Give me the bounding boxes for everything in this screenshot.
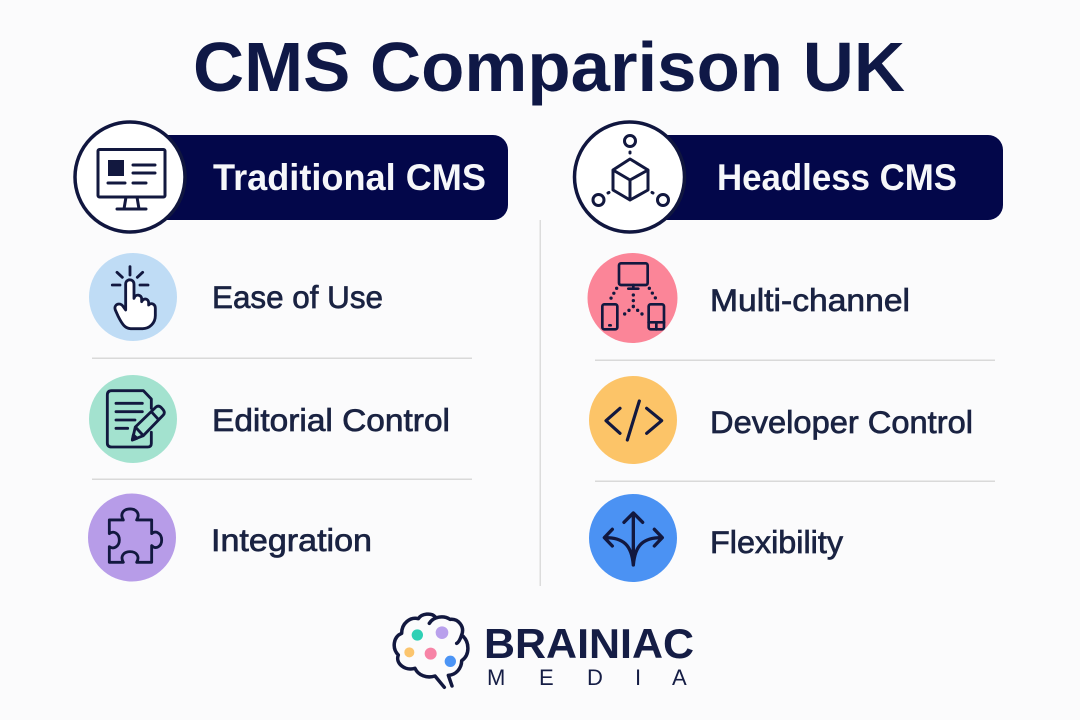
feature: Editorial Control <box>89 375 450 463</box>
heading: Headless CMS: Headless CMS <box>717 157 957 198</box>
feature: Multi-channel <box>588 253 910 343</box>
icon: branching arrows <box>604 513 662 565</box>
icon: brain with coloured dots <box>394 614 468 687</box>
panel: Headless CMS features <box>588 253 973 582</box>
panel: Headless CMS header <box>574 122 1003 232</box>
wordmark: BRAINIAC: BRAINIAC <box>484 620 694 667</box>
label: Ease of Use: Ease of Use <box>212 279 383 315</box>
feature: Flexibility <box>589 494 843 582</box>
label: Flexibility: Flexibility <box>710 524 843 560</box>
icon: desktop monitor <box>98 150 165 209</box>
label: Editorial Control: Editorial Control <box>212 402 450 438</box>
feature: Ease of Use <box>89 253 383 341</box>
label: Developer Control: Developer Control <box>710 404 973 440</box>
panel: Traditional CMS features <box>88 253 450 582</box>
label: Integration: Integration <box>211 522 372 558</box>
heading: Traditional CMS: Traditional CMS <box>213 157 486 198</box>
feature: Developer Control <box>589 376 973 464</box>
icon: code brackets <box>606 401 662 440</box>
feature: Integration <box>88 494 372 582</box>
icon: document and pencil <box>107 391 164 447</box>
panel: Traditional CMS header <box>75 122 508 232</box>
icon: tapping hand <box>112 267 155 329</box>
icon: connected devices <box>602 263 664 329</box>
icon: cube with nodes <box>593 136 668 206</box>
label: Multi-channel: Multi-channel <box>710 282 910 318</box>
title: CMS Comparison UK <box>193 28 905 106</box>
icon: puzzle piece <box>109 509 162 562</box>
wordmark: MEDIA: MEDIA <box>487 665 687 690</box>
logo: Brainiac Media <box>394 614 694 690</box>
